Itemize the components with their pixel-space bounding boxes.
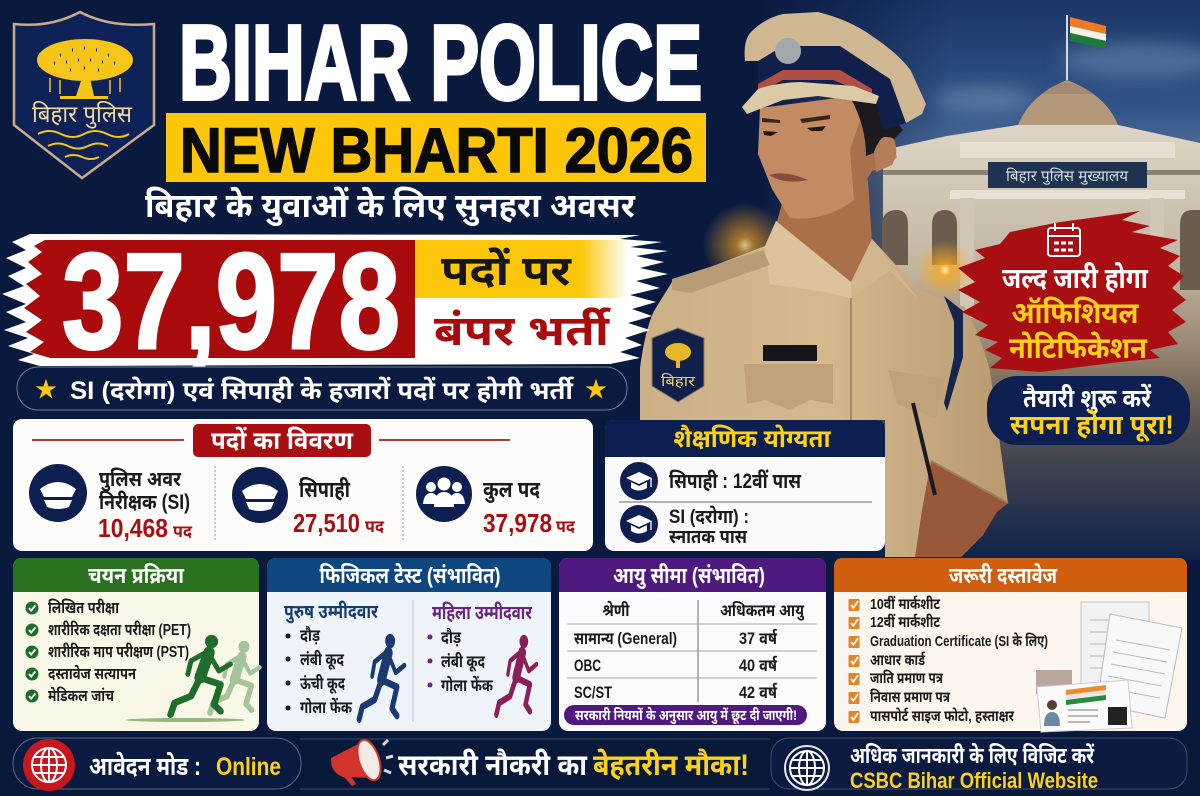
constable post: पद [365,517,384,536]
forearm [915,461,1008,557]
footer: government job message: सरकारी नौकरी का [398,748,588,782]
age table: OBC [574,656,601,675]
notification brush callout [958,211,1186,372]
female candidates [428,602,536,715]
face [758,95,897,219]
male candidates [284,601,404,719]
vacancy banner: बंपर भर्ती [434,307,612,354]
left collar [765,221,851,298]
panel: selection process: शारीरिक माप परीक्षण (PST) [48,643,189,661]
footer: application mode [13,738,301,791]
panel: education [605,420,885,551]
tree canopy [37,39,133,99]
age table: अधिकतम आयु [720,600,805,621]
total posts: कुल पद [483,477,541,503]
subtitle: बिहार के युवाओं के लिए सुनहरा अवसर [145,186,636,227]
calendar icon [1048,223,1080,256]
SI post [29,464,192,543]
neck [776,180,872,292]
arm badge [652,328,704,402]
age table: श्रेणी [602,600,630,620]
male candidates: गोला फेंक [300,697,353,717]
epaulette [672,250,770,293]
age note pill [564,705,807,725]
age table: 40 वर्ष [739,655,778,675]
constable qualification [620,462,801,500]
panel: selection process: शारीरिक दक्षता परीक्षा (PET) [48,621,191,639]
aadhaar card [1037,680,1132,732]
constable post: 27,510 [293,508,360,538]
SI qualification [620,505,749,548]
panel: documents: पासपोर्ट साइज फोटो, हस्ताक्षर [870,707,1014,725]
SI qualification: SI (दरोगा) : [669,506,749,528]
footer: website: अधिक जानकारी के लिए विजिट करें [850,743,1095,768]
female candidates: लंबी कूद [441,651,485,673]
constable qualification: सिपाही : 12वीं पास [669,469,801,493]
shoulder strap [944,296,963,411]
footer: website [771,738,1187,793]
female candidates: गोला फेंक [441,675,494,695]
footer: website: CSBC Bihar Official Website [850,768,1098,793]
SI post: पद [173,522,192,541]
footer: application mode: Online [216,753,281,781]
age table: 37 वर्ष [739,628,778,648]
vacancy banner: 37,978 [62,225,400,377]
documents illustration [1036,602,1182,732]
constable post: सिपाही [299,477,350,502]
uniform shirt [640,221,1008,557]
building sign [988,162,1147,188]
panel: physical test [267,558,551,731]
SI post: 10,468 [98,513,168,543]
panel: documents [834,558,1187,732]
preparation pill: तैयारी शुरू करें [1023,383,1152,414]
ear [874,137,896,172]
eyes and brows [762,115,830,123]
glow behind officer [703,203,975,300]
panel: selection process [13,558,260,731]
male candidates: दौड़ [300,625,320,645]
SI post: पुलिस अवर [99,467,182,492]
runners [125,635,260,722]
police logo shield [14,12,154,178]
right collar [851,239,919,300]
male candidates: पुरुष उम्मीदवार [284,601,379,624]
panel: selection process: चयन प्रक्रिया [88,563,184,588]
posts pill [17,367,627,410]
panel: physical test: फिजिकल टेस्ट (संभावित) [320,563,500,588]
cap crown [745,12,926,123]
SI post: निरीक्षक (SI) [99,490,190,514]
total posts: पद [556,517,575,536]
building sign: बिहार पुलिस मुख्यालय [1006,168,1128,186]
panel: documents: जरूरी दस्तावेज [949,563,1058,588]
arm badge: बिहार [661,373,695,389]
posts pill: ★ [585,377,607,402]
constable post [232,467,384,538]
megaphone icon [331,737,393,786]
preparation pill: सपना होगा पूरा! [1010,410,1174,442]
total posts [416,466,575,538]
panel: documents: 10वीं मार्कशीट [870,595,941,613]
title: BIHAR POLICE [179,4,702,122]
post details heading: पदों का विवरण [211,426,354,455]
female candidates: महिला उम्मीदवार [432,602,532,624]
panel: selection process: लिखित परीक्षा [48,599,119,617]
logo text: बिहार पुलिस [32,101,132,129]
radio cable [913,403,935,495]
officer illustration [640,12,1008,557]
footer: government job message [300,737,770,789]
notification brush callout: जल्द जारी होगा [1002,262,1148,295]
panel: documents: 12वीं मार्कशीट [870,613,941,631]
sleeve fold [931,461,1008,503]
age table: सामान्य (General) [574,629,677,648]
mouth [769,173,808,182]
vacancy banner: पदों पर [441,247,573,294]
notification brush callout: ऑफिशियल [1012,296,1139,330]
panel: documents: जाति प्रमाण पत्र [870,670,944,687]
notification brush callout: नोटिफिकेशन [1009,330,1147,365]
male candidates: लंबी कूद [300,649,344,671]
age table: SC/ST [574,683,612,702]
cap visor [742,82,879,114]
preparation pill [987,376,1190,445]
posts pill: ★ [35,377,57,402]
panel: age limit: आयु सीमा (संभावित) [613,563,765,589]
panel: post details [13,419,593,551]
cap red stripe [758,70,872,96]
yellow title bar: NEW BHARTI 2026 [180,116,693,186]
age table [574,600,805,702]
panel: selection process: दस्तावेज सत्यापन [48,664,137,683]
total posts: 37,978 [483,508,552,538]
panel: selection process: मेडिकल जांच [48,686,115,705]
posts pill: SI (दरोगा) एवं सिपाही के हजारों पदों पर होगी भर्ती [70,376,575,405]
footer: application mode: आवेदन मोड : [89,751,201,781]
male candidates: ऊंची कूद [300,673,345,695]
panel: documents: Graduation Certificate (SI के लिए) [870,632,1048,650]
cap badge [775,38,801,64]
panel: education: शैक्षणिक योग्यता [674,424,831,453]
panel: documents: निवास प्रमाण पत्र [870,689,951,706]
hair [850,97,903,156]
panel: age limit [559,558,826,731]
panel: documents: आधार कार्ड [870,651,926,669]
vacancy banner [2,225,668,377]
name plate [763,345,817,361]
building: Bihar Police headquarters [882,15,1200,440]
age table: 42 वर्ष [739,682,778,702]
footer: government job message: बेहतरीन मौका! [593,747,749,782]
age note pill: सरकारी नियमों के अनुसार आयु में छूट दी जाएगी! [575,706,797,725]
SI qualification: स्नातक पास [669,527,748,548]
female candidates: दौड़ [441,627,461,647]
pockets [744,364,944,418]
cap band [758,46,906,130]
